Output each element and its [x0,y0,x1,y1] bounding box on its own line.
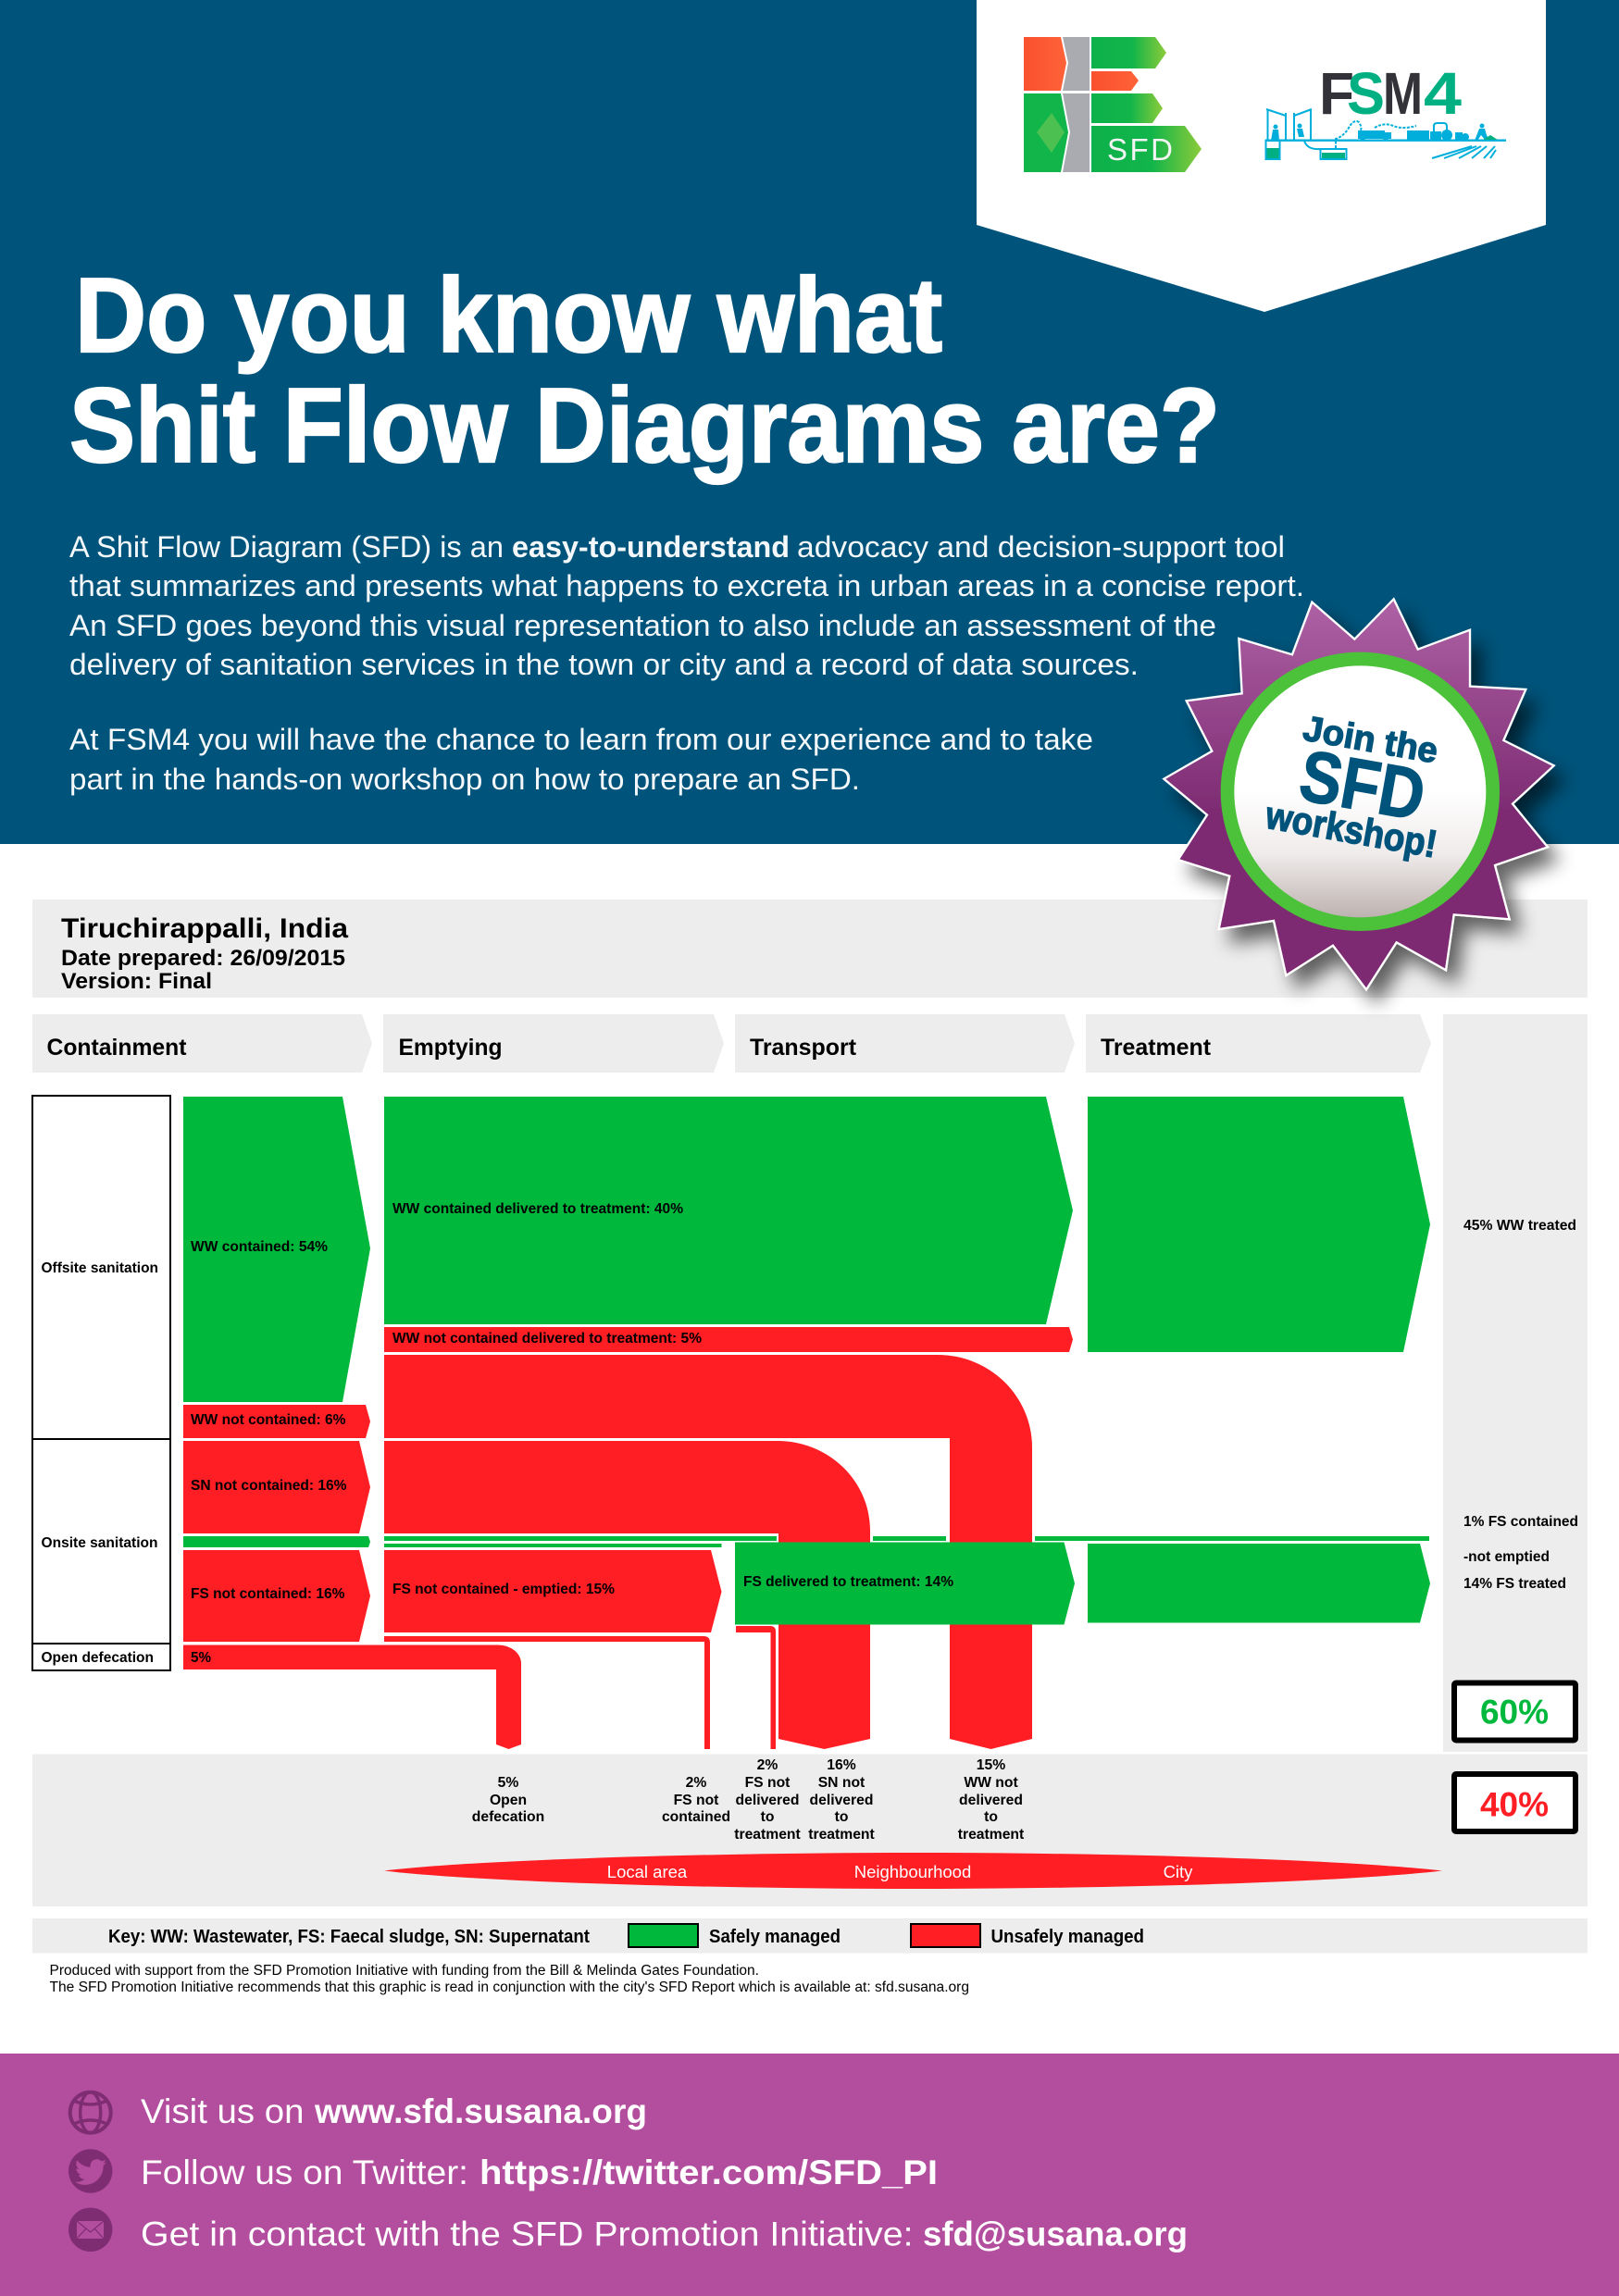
key: Key: WW: Wastewater, FS: Faecal sludge, SN: Supernatant [108,1927,590,1947]
logo: SFD: SFD [1107,132,1173,167]
icon: twitter [68,2149,112,2193]
link: twitter [141,2153,938,2191]
link: email: sfd@susana.org [923,2215,1188,2253]
title box: Tiruchirappalli, India [61,913,348,944]
outcome labels: 2% [686,1775,706,1791]
header panel [0,0,1619,844]
intro paragraph: that summarizes and presents what happens to excreta in urban areas in a concise report. [69,569,1304,602]
unsafe flow: open defecation [183,1645,521,1749]
column headers: Treatment [1101,1035,1212,1061]
column headers: Transport [750,1035,857,1061]
white disc [1234,665,1486,917]
intro paragraph: A Shit Flow Diagram (SFD) is an [69,530,504,564]
outcome labels: to [984,1809,998,1825]
column headers: Emptying [398,1035,502,1061]
treated wastewater flow [384,1097,1073,1324]
title box: Date prepared: 26/09/2015 [61,946,345,971]
WW not contained delivered flow [384,1327,1073,1352]
summary labels: 1% FS contained [1463,1514,1578,1530]
main title [69,257,1220,485]
title box [32,900,1588,998]
row labels: Offsite sanitation [41,1260,158,1276]
link: twitter: Follow us on Twitter: [141,2153,468,2191]
footer panel [0,2054,1619,2296]
row labels [32,1096,170,1670]
main title: Do you know what [75,257,942,375]
key: Safely managed [709,1927,841,1947]
treatment: wastewater [1088,1097,1430,1352]
outcome labels: FS not [745,1775,791,1791]
outcome labels: to [761,1809,774,1825]
logo: FSM4: F [1319,60,1354,127]
title box: Version: Final [61,969,212,994]
outcome labels: treatment [958,1827,1025,1843]
link: twitter: https://twitter.com/SFD_PI [479,2153,938,2191]
intro paragraph: advocacy and decision-support tool [797,530,1285,564]
outcome labels: FS not [674,1793,719,1808]
receiving area lens: Local area [607,1862,688,1881]
link: email: Get in contact with the SFD Promotion Initiative: [141,2215,914,2253]
outcome labels: SN not [818,1775,866,1791]
FS emptied flow: FS not contained - emptied: 15% [392,1582,615,1597]
outcome labels: treatment [734,1827,802,1843]
FS delivered to treatment flow: FS delivered to treatment: 14% [743,1574,953,1590]
outcome labels: WW not [964,1775,1018,1791]
60% safely managed: 60% [1480,1694,1549,1731]
link: website [141,2092,647,2130]
key [32,1918,1588,1953]
workshop paragraph [69,723,1093,796]
thin flow: FS not contained [384,1636,710,1749]
intro paragraph [69,530,1304,681]
column headers: Containment [46,1035,187,1061]
logo: FSM4: M [1383,60,1423,127]
badge text: SFD [1294,734,1431,836]
receiving area lens: City [1164,1862,1193,1881]
FS delivered to treatment flow [735,1542,1075,1625]
receiving area lens [384,1853,1442,1889]
logo: SFD [1024,37,1202,172]
key: Unsafely managed [990,1927,1144,1947]
outcome labels [472,1757,1025,1843]
link: website: www.sfd.susana.org [314,2092,647,2130]
thin flow: FS not delivered [736,1626,776,1749]
outcome labels: delivered [810,1793,873,1808]
bottom outcomes panel background [32,1755,1588,1906]
workshop paragraph: At FSM4 you will have the chance to learn from our experience and to take [69,723,1093,756]
unsafe flow: wastewater not delivered [384,1355,1032,1749]
badge text [1262,704,1456,866]
outcome labels: Open [490,1793,527,1808]
40% unsafely managed: 40% [1480,1786,1549,1823]
containment flows: WW contained: 54% [191,1239,328,1255]
production note [50,1963,969,1995]
containment flows [183,1097,370,1642]
production note: Produced with support from the SFD Promotion Initiative with funding from the Bill & Melinda Gates Foundation. [50,1963,759,1979]
badge text: workshop! [1262,793,1440,866]
outcome labels: defecation [472,1809,544,1825]
SFD report panel [32,900,1588,1995]
outcome labels: 2% [757,1757,778,1773]
containment flows: WW not contained: 6% [191,1412,346,1428]
star burst [1164,599,1554,989]
outcome labels: delivered [959,1793,1023,1808]
summary labels [1463,1218,1578,1592]
thin green flow: FS contained not emptied [384,1536,1429,1547]
60% safely managed [1454,1682,1575,1740]
outcome labels: contained [662,1809,730,1825]
unsafe flow: open defecation: 5% [191,1650,211,1666]
row labels: Open defecation [41,1650,154,1666]
containment flows: SN not contained: 16% [191,1478,346,1494]
logo: FSM4 [1264,60,1506,159]
icon: globe [70,2092,111,2133]
summary labels: -not emptied [1463,1549,1550,1565]
containment flows: FS not contained: 16% [191,1586,344,1602]
WW not contained delivered flow: WW not contained delivered to treatment: 5% [392,1331,702,1347]
logo banner [977,0,1546,312]
green ring [1221,652,1500,931]
link: email [141,2215,1188,2253]
outcome labels: to [835,1809,848,1825]
intro paragraph: An SFD goes beyond this visual representation to also include an assessment of the [69,609,1216,642]
intro paragraph: delivery of sanitation services in the town or city and a record of data sources. [69,648,1139,681]
receiving area lens: Neighbourhood [854,1862,971,1881]
40% unsafely managed [1454,1774,1575,1831]
intro paragraph: easy-to-understand [512,530,790,564]
outcome labels: 15% [977,1757,1005,1773]
treatment: faecal sludge [1088,1544,1430,1623]
logo: FSM4: 4 [1424,60,1462,127]
unsafe flow: supernatant not delivered [384,1441,870,1749]
icon: envelope [68,2208,112,2252]
workshop paragraph: part in the hands-on workshop on how to prepare an SFD. [69,763,860,796]
logo: FSM4: S [1347,60,1385,127]
main title: Shit Flow Diagrams are? [69,367,1220,485]
treated wastewater flow: WW contained delivered to treatment: 40% [392,1201,683,1217]
outcome labels: 16% [827,1757,856,1773]
workshop badge [1164,599,1554,989]
right summary column [1443,1014,1588,1752]
summary labels: 45% WW treated [1463,1218,1576,1234]
production note: The SFD Promotion Initiative recommends that this graphic is read in conjunction with the city's SFD Report which is available at: sfd.susana.org [50,1980,969,1995]
row labels: Onsite sanitation [41,1535,157,1551]
link: website: Visit us on [141,2092,304,2130]
column headers [32,1014,1431,1073]
summary labels: 14% FS treated [1463,1576,1566,1592]
badge text: Join the [1301,709,1440,772]
FS emptied flow [384,1550,722,1632]
outcome labels: delivered [736,1793,799,1808]
outcome labels: treatment [808,1827,876,1843]
outcome labels: 5% [498,1775,518,1791]
